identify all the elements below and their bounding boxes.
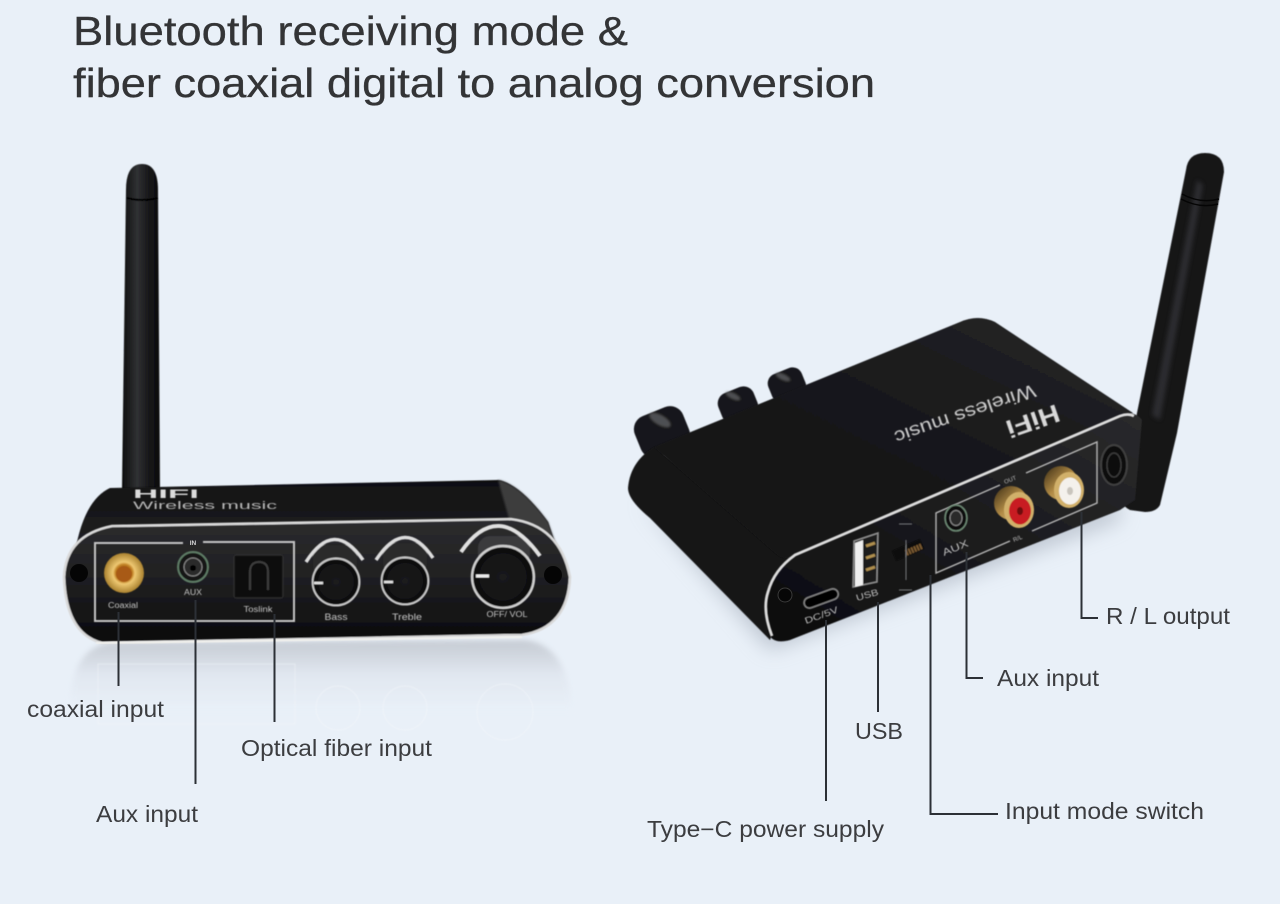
shadow — [640, 500, 1120, 650]
callout: input mode switch: Input mode switch — [1005, 798, 1204, 824]
rear face — [765, 413, 1142, 641]
white RCA output — [1044, 466, 1084, 508]
silver rim — [766, 414, 1134, 636]
callout: right aux input — [966, 552, 1100, 691]
knobs on rear side — [630, 364, 809, 462]
right device port captions — [803, 538, 971, 626]
USB-C port — [802, 587, 840, 610]
left device port captions: AUX — [184, 588, 203, 597]
OUT and R/L marks — [1004, 475, 1024, 544]
OUT and R/L marks: R/L — [1013, 535, 1024, 544]
callout: R/L output — [1082, 512, 1231, 629]
left device port captions: Coaxial — [108, 601, 138, 610]
bottom highlight — [96, 637, 522, 643]
coaxial port — [104, 553, 144, 593]
USB port — [853, 533, 878, 587]
IN port frame — [95, 542, 294, 621]
right antenna — [1122, 153, 1224, 512]
title: fiber coaxial digital to analog conversion — [73, 60, 875, 106]
callout: coaxial input — [27, 612, 165, 722]
left device port captions: OFF/ VOL — [486, 610, 528, 619]
aux port — [945, 505, 967, 531]
callout: USB: USB — [855, 718, 903, 744]
right device port captions: DC/5V — [803, 605, 840, 626]
title — [73, 8, 875, 106]
antenna connector — [1101, 445, 1127, 485]
right device port captions: AUX — [941, 538, 971, 559]
callout: optical fiber input: Optical fiber input — [241, 735, 433, 761]
right device: rear angled view — [628, 153, 1224, 650]
HiFi print: HiFi — [1002, 398, 1063, 443]
callout: type-c power supply: Type−C power supply — [647, 816, 885, 842]
left device screws — [70, 564, 562, 584]
aux port — [178, 552, 208, 582]
floor reflection — [70, 640, 572, 710]
callout: R/L output: R / L output — [1106, 603, 1231, 629]
side shadow on right of top plate — [498, 480, 556, 545]
top plate — [75, 480, 558, 552]
IN label: IN — [190, 540, 197, 547]
callout: input mode switch — [930, 575, 1204, 824]
screw — [778, 588, 792, 602]
reflected port outlines — [98, 664, 533, 740]
volume knob — [461, 526, 540, 608]
left device port captions: Bass — [324, 612, 348, 622]
bass knob — [306, 539, 363, 606]
toslink port — [234, 555, 283, 598]
mode switch — [894, 524, 922, 590]
enclosure left side — [628, 447, 800, 640]
HIFI print: HIFI — [133, 487, 199, 501]
callout: left aux input: Aux input — [96, 801, 199, 827]
callout: coaxial input: coaxial input — [27, 696, 165, 722]
Wireless music print: Wireless music — [133, 500, 278, 512]
treble knob — [376, 537, 433, 604]
front face — [64, 519, 570, 643]
left device port captions — [108, 588, 528, 622]
right device port captions: USB — [855, 587, 880, 603]
left device port captions: Treble — [392, 612, 422, 622]
top surface — [654, 318, 1133, 558]
title: Bluetooth receiving mode & — [73, 8, 628, 54]
red RCA output — [994, 486, 1034, 528]
OUT and R/L marks: OUT — [1004, 475, 1018, 486]
left antenna — [122, 164, 160, 490]
output port frame — [936, 442, 1097, 573]
left device port captions: Toslink — [244, 605, 274, 614]
Wireless music print: Wireless music — [892, 380, 1038, 447]
callout: right aux input: Aux input — [997, 665, 1100, 691]
left device: front view amplifier — [64, 164, 572, 740]
